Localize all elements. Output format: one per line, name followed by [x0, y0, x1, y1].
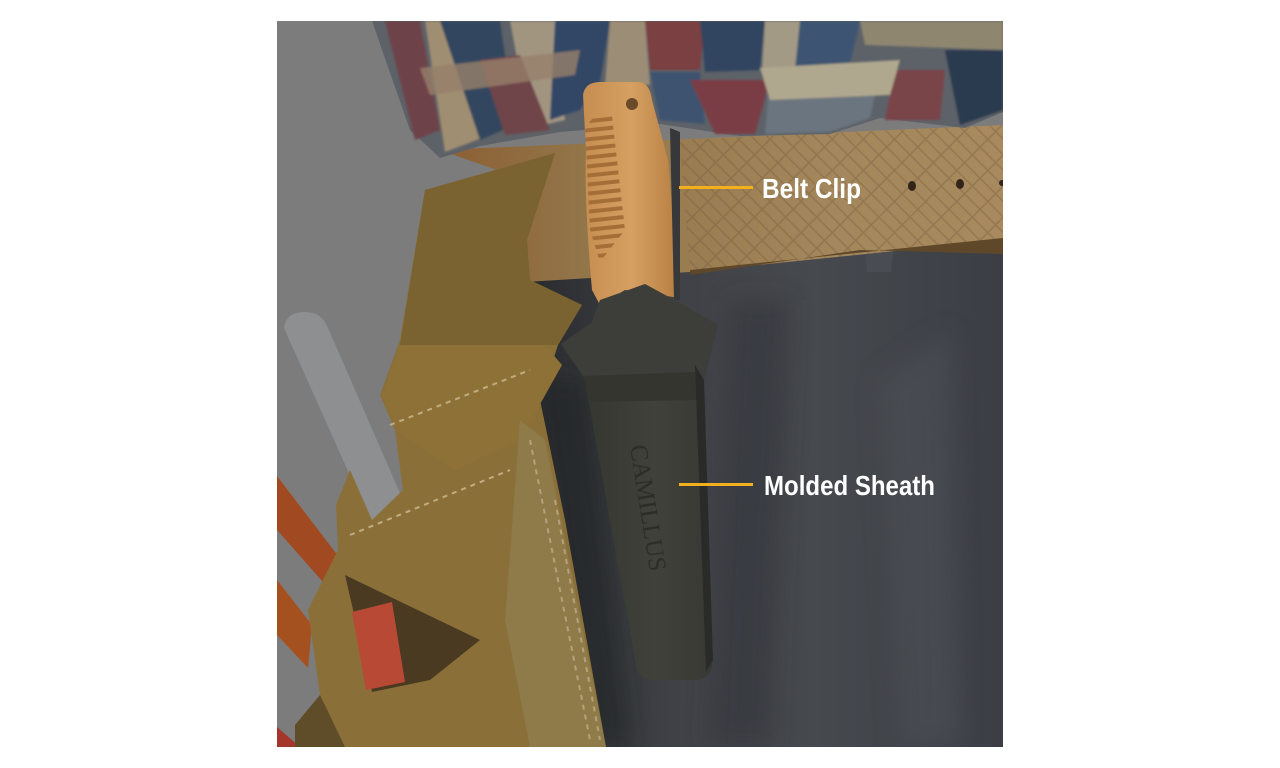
pouch upper flap [400, 153, 582, 345]
belt [440, 125, 1003, 282]
shirt [372, 21, 1003, 158]
callout: molded sheath: Molded Sheath [764, 470, 935, 501]
sheath [561, 284, 718, 680]
pouch bottom shadow [295, 695, 345, 747]
belt texture [680, 125, 1003, 272]
trouser belt loop [891, 252, 892, 266]
sheath collar [561, 284, 718, 380]
background [277, 21, 1003, 747]
product photo infographic [277, 21, 1003, 747]
pouch lower pocket interior [345, 575, 480, 692]
sheath body [588, 394, 713, 680]
strap stitching [530, 440, 600, 740]
handle lanyard hole [626, 98, 638, 110]
sheath collar highlight [608, 372, 695, 401]
handle grip [585, 114, 625, 262]
shirt plaid [385, 21, 1003, 152]
trouser folds [540, 300, 960, 747]
tools in pouch: grey handle [284, 312, 403, 521]
belt lower edge [690, 238, 1003, 275]
callout: belt clip [679, 173, 861, 204]
sheath brand: CAMILLUS [624, 443, 671, 573]
pouch middle pocket [394, 356, 562, 430]
knife handle [583, 82, 680, 305]
photo: man's hip with belt, tool pouch and knife [277, 21, 1005, 747]
belt clip [670, 128, 680, 300]
red tool in pocket [352, 602, 405, 690]
red tool handles [277, 476, 336, 582]
trousers [530, 245, 1003, 747]
pouch stitching [350, 370, 530, 535]
pouch stitched strap [505, 420, 606, 747]
callout: belt clip: Belt Clip [762, 173, 861, 204]
belt holes [908, 179, 1005, 191]
sheath side edge [695, 365, 713, 672]
leather pouch silhouette [295, 153, 606, 747]
callout: molded sheath [679, 470, 935, 501]
